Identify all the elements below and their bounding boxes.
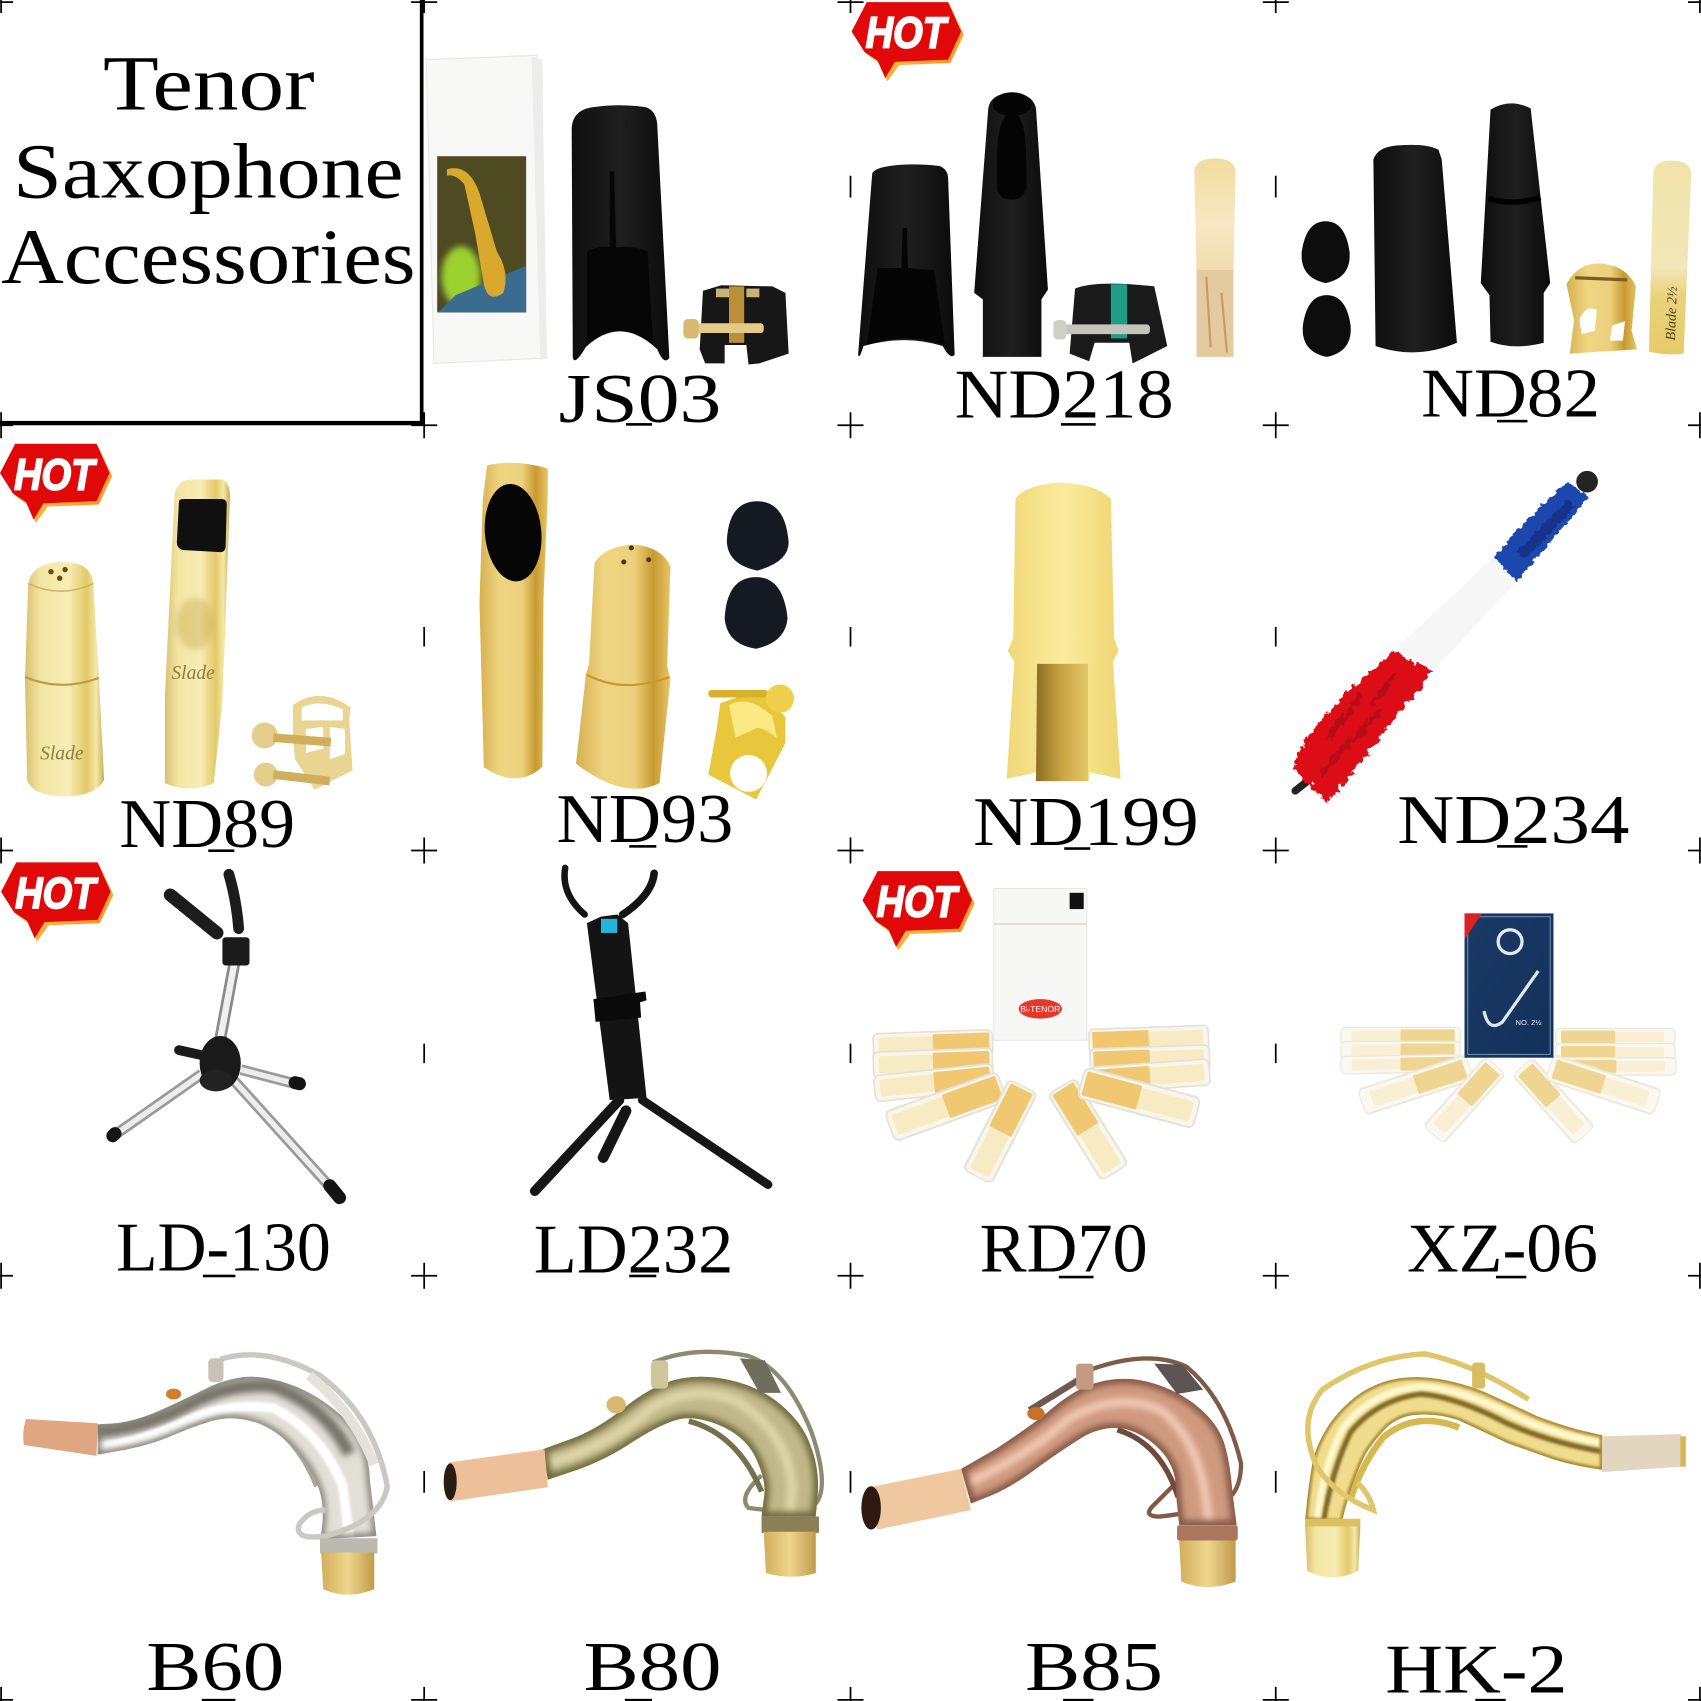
label: ND82: ND82 — [1421, 356, 1600, 433]
label: ND89: ND89 — [119, 786, 295, 863]
fork — [565, 868, 585, 915]
product: B80 neck — [444, 1352, 822, 1577]
label: LD-130: LD-130 — [116, 1209, 331, 1286]
hot badge: HOT — [866, 10, 949, 58]
hot badge: HOT — [15, 870, 99, 918]
icon: gold cap: Slade — [40, 743, 84, 764]
icon: mouthpiece — [974, 92, 1048, 357]
body — [587, 915, 647, 1100]
hot badge — [0, 444, 112, 523]
icon: gold ligature — [1566, 263, 1637, 354]
icon: white reed box — [994, 888, 1087, 1040]
brass tenon — [764, 1532, 816, 1577]
inner tube — [244, 1414, 317, 1486]
stem — [1295, 782, 1306, 791]
hub — [179, 1036, 241, 1091]
hot badge — [1, 862, 113, 942]
key cup — [166, 1389, 181, 1399]
tube — [542, 1377, 818, 1517]
wire key — [220, 1355, 387, 1537]
icon: reed — [1649, 161, 1691, 354]
clamp — [593, 992, 647, 1022]
ring — [1305, 1519, 1360, 1527]
key post — [1076, 1364, 1094, 1390]
icon: reed: Blade 2½ — [1663, 286, 1681, 341]
label: LD232: LD232 — [534, 1211, 733, 1288]
product: ND199 — [1007, 483, 1121, 781]
cork — [1602, 1434, 1681, 1472]
cork — [23, 1419, 98, 1456]
opening — [444, 1463, 457, 1500]
product: HK-2 neck — [1305, 1354, 1686, 1577]
bracket — [1154, 1364, 1203, 1394]
icon: ligature — [1053, 284, 1167, 363]
slot — [1036, 664, 1088, 781]
wire key — [653, 1352, 822, 1510]
hot badge: HOT — [877, 879, 960, 927]
product: ND82 — [1302, 103, 1691, 357]
wire key — [1308, 1354, 1529, 1510]
rod — [1029, 1373, 1089, 1410]
holder — [222, 937, 250, 965]
legs — [115, 1070, 332, 1189]
label: ND199: ND199 — [973, 784, 1199, 861]
product: ND93 — [479, 463, 794, 800]
tag — [601, 919, 617, 933]
icon: mouthpiece — [1481, 103, 1550, 346]
tube — [961, 1379, 1237, 1525]
title: Saxophone — [13, 127, 404, 214]
wire key — [1089, 1358, 1241, 1517]
key cup — [606, 1396, 626, 1414]
label: ND234: ND234 — [1397, 782, 1629, 859]
tube — [1305, 1377, 1602, 1522]
icon: gold cap — [25, 562, 104, 796]
ring — [762, 1517, 819, 1533]
icon: gold cap — [576, 545, 670, 789]
hot badge: HOT — [14, 451, 97, 499]
title panel border — [0, 0, 424, 425]
hot badge — [852, 2, 964, 81]
icon: gold ligature — [252, 696, 353, 790]
brass tenon — [1179, 1540, 1236, 1587]
legs — [535, 1100, 768, 1191]
tip — [1576, 471, 1598, 493]
ring — [1177, 1525, 1238, 1540]
brass tenon — [1305, 1526, 1360, 1577]
product: ND89 — [25, 479, 353, 796]
product: ND218 — [858, 92, 1236, 363]
inner tube — [1117, 1430, 1178, 1497]
product: JS03 — [426, 55, 789, 364]
inner tube — [689, 1421, 762, 1492]
cork end — [1680, 1436, 1686, 1467]
feet — [113, 1083, 340, 1198]
icon: white box with saxophone picture — [426, 55, 547, 363]
icon: rubber patches — [725, 501, 789, 649]
label: XZ-06: XZ-06 — [1407, 1210, 1598, 1287]
cork — [444, 1449, 548, 1501]
icon: rubber patches — [1302, 221, 1351, 357]
opening — [861, 1486, 881, 1530]
key cup — [1027, 1407, 1045, 1420]
key post — [208, 1358, 223, 1382]
icon: black cap — [572, 105, 669, 360]
icon: yellow cap — [1007, 483, 1121, 781]
label: JS03: JS03 — [559, 361, 721, 438]
cork — [872, 1469, 971, 1530]
ring — [320, 1538, 378, 1553]
icon: blue reed box: NO. 2½ — [1515, 1018, 1542, 1027]
product: B85 neck — [861, 1358, 1241, 1587]
icon: gold mouthpiece: Slade — [171, 663, 215, 684]
key post — [651, 1360, 668, 1389]
label: ND93: ND93 — [557, 781, 733, 858]
product: XZ-06 reeds — [1341, 913, 1676, 1144]
icon: black cap — [858, 164, 955, 356]
icon: blue reed box — [1465, 913, 1553, 1058]
tube — [92, 1377, 376, 1539]
key post — [1472, 1363, 1485, 1389]
blue section — [1494, 482, 1588, 581]
icon: gold mouthpiece — [165, 479, 230, 789]
product: ND234 swab — [1293, 471, 1598, 803]
product: LD-130 stand — [113, 874, 340, 1198]
icon: reed fan — [873, 1025, 1210, 1184]
icon: ligature — [683, 285, 789, 364]
white section — [1393, 557, 1517, 672]
title: Accessories — [1, 213, 415, 300]
key band — [309, 1376, 374, 1465]
hot badge — [862, 871, 975, 950]
bracket — [740, 1358, 781, 1393]
label: RD70: RD70 — [980, 1210, 1148, 1287]
fork — [170, 895, 217, 933]
icon: reed — [1194, 158, 1236, 357]
pole — [220, 963, 234, 1039]
icon: gold ligature — [708, 685, 794, 800]
icon: white reed box: B♭TENOR — [1020, 1004, 1060, 1014]
icon: black cap — [1373, 145, 1457, 352]
title — [1, 40, 415, 300]
brass tenon — [321, 1552, 374, 1595]
product: RD70 reeds — [873, 888, 1210, 1184]
inner tube — [1351, 1421, 1459, 1499]
title: Tenor — [103, 40, 315, 127]
icon: gold mouthpiece — [479, 463, 548, 778]
product: B60 neck — [23, 1355, 387, 1595]
icon: reed fan — [1341, 1027, 1676, 1144]
red section — [1293, 652, 1433, 803]
label: ND218: ND218 — [955, 357, 1174, 434]
product: LD232 stand — [535, 868, 768, 1191]
